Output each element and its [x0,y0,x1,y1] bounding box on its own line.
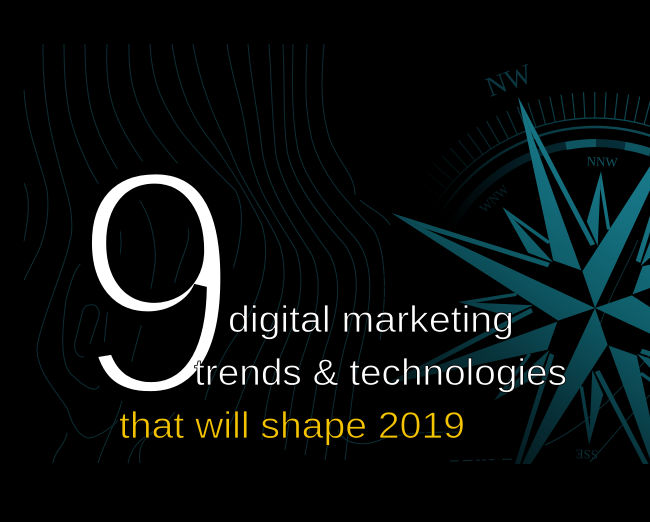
topographic contour lines [24,44,650,463]
compass tick ring [392,105,650,511]
heading line 1: digital marketing [228,299,514,340]
compass segmented band [462,139,650,211]
star points [384,96,650,464]
compass outer ring [444,117,650,460]
heading line 2: trends & technologies [194,352,567,393]
heading line 3: that will shape 2019 [119,405,465,446]
label: SSE: SSE [575,447,598,462]
compass rose [382,64,650,464]
label: WNW: WNW [476,181,512,216]
big numeral 9: 9 [71,101,241,465]
compass inner ring [448,126,650,460]
label: NNW: NNW [586,153,619,170]
label: NW: NW [482,58,537,104]
